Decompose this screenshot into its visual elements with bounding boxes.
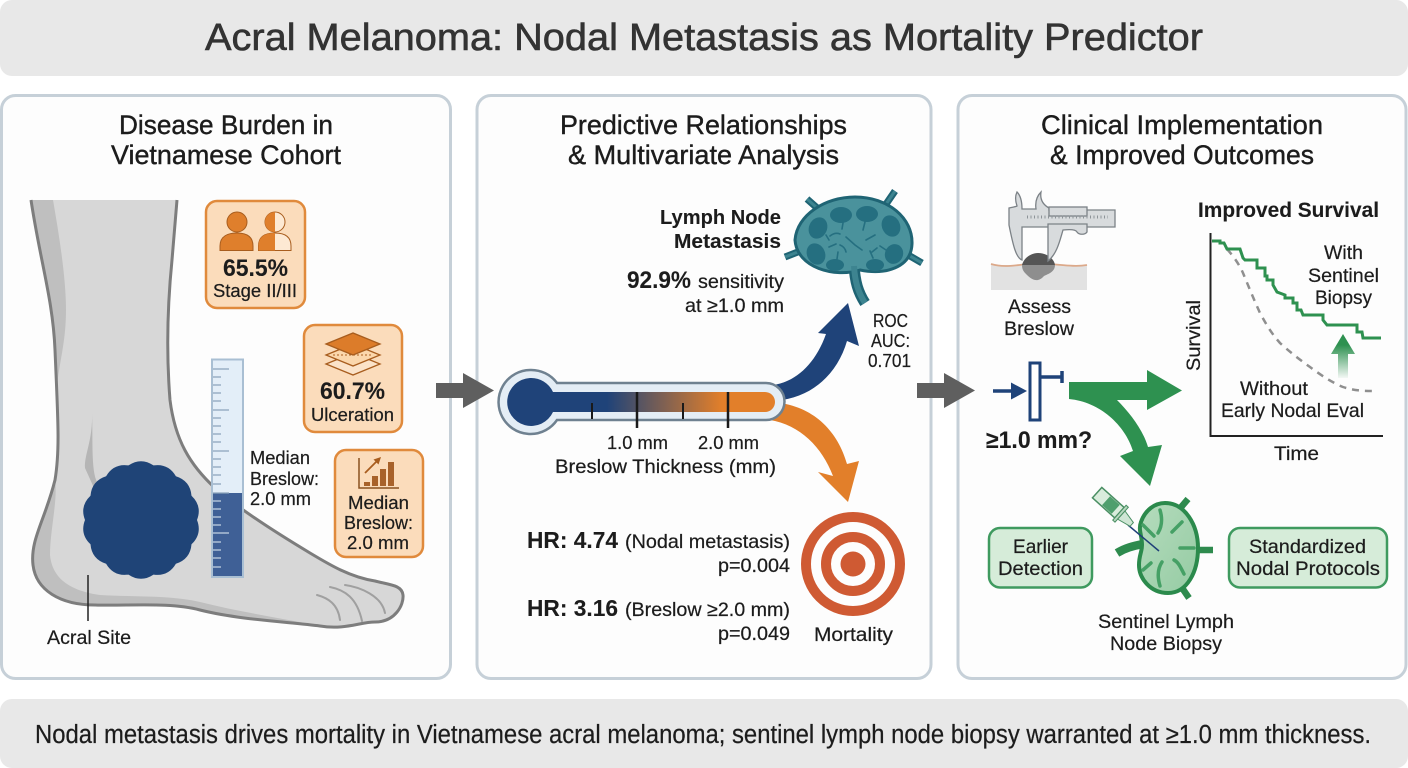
survival chart	[1183, 199, 1383, 465]
heading: clinical implementation	[1041, 110, 1323, 170]
sentinel biopsy label: Node Biopsy	[1110, 633, 1222, 655]
survival chart: With	[1324, 242, 1363, 264]
threshold question: ≥1.0 mm?	[986, 427, 1092, 454]
panel: predictive relationships	[477, 96, 931, 678]
sensitivity stat: at ≥1.0 mm	[685, 295, 784, 317]
callout: standardized nodal protocols: Nodal Protocols	[1236, 558, 1380, 580]
median breslow label: Median	[250, 447, 310, 468]
survival chart: Time	[1274, 443, 1319, 465]
hazard ratio: breslow: p=0.049	[718, 623, 790, 645]
arrow: survival gain	[1331, 334, 1355, 378]
heading: predictive relationships: Predictive Relationships	[560, 110, 847, 140]
lymph node label: Lymph Node	[660, 206, 781, 229]
lymph node label: Metastasis	[674, 230, 781, 253]
arrow: decision branches	[1069, 370, 1182, 486]
heading: predictive relationships	[560, 110, 847, 170]
green curve: with sentinel biopsy	[1212, 241, 1381, 338]
ruler: breslow depth	[212, 360, 243, 577]
icon: sentinel lymph node with syringe	[1090, 485, 1213, 598]
icon: mortality target	[806, 517, 900, 646]
title: Acral Melanoma: Nodal Metastasis as Mortality Predictor	[205, 17, 1203, 59]
stat card: ulceration	[304, 325, 402, 432]
panel: clinical implementation	[958, 96, 1406, 678]
roc auc label: 0.701	[868, 350, 911, 371]
roc auc label: AUC:	[871, 330, 910, 351]
acral site label	[47, 575, 131, 649]
breslow thermometer scale: 2.0 mm	[698, 432, 759, 453]
survival chart: Early Nodal Eval	[1221, 400, 1364, 422]
sentinel biopsy label	[1098, 611, 1234, 655]
assess breslow label: Breslow	[1004, 318, 1075, 340]
arrow: panel 1 to panel 2	[436, 373, 494, 408]
breslow thermometer scale	[499, 370, 784, 478]
heading: disease burden	[111, 110, 342, 170]
arrow: to mortality	[770, 403, 859, 502]
arrow: to lymph node	[773, 303, 859, 400]
stat card: stage: Stage II/III	[213, 281, 297, 301]
heading: clinical implementation: Clinical Implementation	[1041, 110, 1323, 140]
callout: earlier detection: Earlier	[1013, 536, 1068, 558]
survival chart: Without	[1240, 378, 1309, 400]
hazard ratio: nodal metastasis	[527, 527, 790, 577]
arrow: panel 2 to panel 3	[917, 373, 975, 408]
median breslow label: 2.0 mm	[250, 488, 311, 509]
panel: disease burden	[2, 96, 450, 678]
icon: lymph node metastasis	[785, 191, 922, 303]
callout: standardized nodal protocols: Standardized	[1249, 536, 1366, 558]
assess breslow label	[1004, 296, 1075, 340]
stat card: stage: 65.5%	[223, 255, 288, 282]
hazard ratio: nodal metastasis: HR: 4.74	[527, 527, 618, 553]
hazard ratio: nodal metastasis: (Nodal metastasis)	[625, 531, 790, 553]
hazard ratio: breslow	[527, 595, 790, 645]
assess breslow label: Assess	[1008, 296, 1071, 318]
survival chart: Sentinel	[1308, 265, 1379, 287]
dashed curve: without early nodal evaluation	[1227, 249, 1377, 391]
sensitivity stat: sensitivity	[698, 271, 784, 293]
sentinel biopsy label: Sentinel Lymph	[1098, 611, 1234, 633]
roc auc label	[868, 310, 911, 371]
hazard ratio: breslow: (Breslow ≥2.0 mm)	[625, 599, 790, 621]
survival chart: Biopsy	[1315, 287, 1372, 309]
icon: skin layers	[326, 333, 380, 375]
hazard ratio: nodal metastasis: p=0.004	[718, 555, 790, 577]
heading: disease burden: Disease Burden in	[119, 110, 333, 140]
breslow thermometer scale: Breslow Thickness (mm)	[555, 456, 776, 478]
icon: rising bar chart	[359, 457, 399, 488]
stat card: ulceration: 60.7%	[320, 378, 385, 405]
icon: threshold gauge	[993, 363, 1062, 420]
callout: earlier detection	[989, 528, 1092, 588]
stat card: ulceration: Ulceration	[311, 405, 394, 425]
sensitivity stat	[627, 267, 784, 317]
heading: predictive relationships: & Multivariate Analysis	[568, 140, 839, 170]
heading: clinical implementation: & Improved Outcomes	[1050, 140, 1314, 170]
stat card: median breslow	[335, 450, 423, 557]
melanoma lesion	[83, 461, 199, 579]
icon: caliper on lesion	[991, 192, 1115, 290]
survival chart: Improved Survival	[1198, 199, 1379, 222]
callout: standardized nodal protocols	[1229, 528, 1387, 588]
stat card: median breslow: Breslow:	[344, 512, 413, 533]
median breslow label: Breslow:	[250, 468, 319, 489]
conclusion banner	[0, 699, 1408, 768]
callout: earlier detection: Detection	[998, 558, 1083, 580]
lymph node label	[660, 206, 781, 253]
hazard ratio: breslow: HR: 3.16	[527, 595, 618, 621]
stat card: median breslow: Median	[348, 492, 409, 513]
stat card: median breslow: 2.0 mm	[347, 532, 409, 553]
breslow thermometer scale: 1.0 mm	[607, 432, 668, 453]
icon: patients	[220, 212, 291, 250]
foot illustration	[31, 200, 403, 627]
heading: disease burden: Vietnamese Cohort	[111, 140, 342, 170]
stat card: stage	[206, 201, 305, 308]
median breslow label	[250, 447, 319, 509]
survival chart: Survival	[1183, 300, 1205, 371]
sensitivity stat: 92.9%	[627, 267, 691, 294]
roc auc label: ROC	[873, 310, 908, 331]
title	[0, 0, 1408, 76]
icon: mortality target: Mortality	[814, 625, 894, 646]
acral site label: Acral Site	[47, 628, 131, 649]
